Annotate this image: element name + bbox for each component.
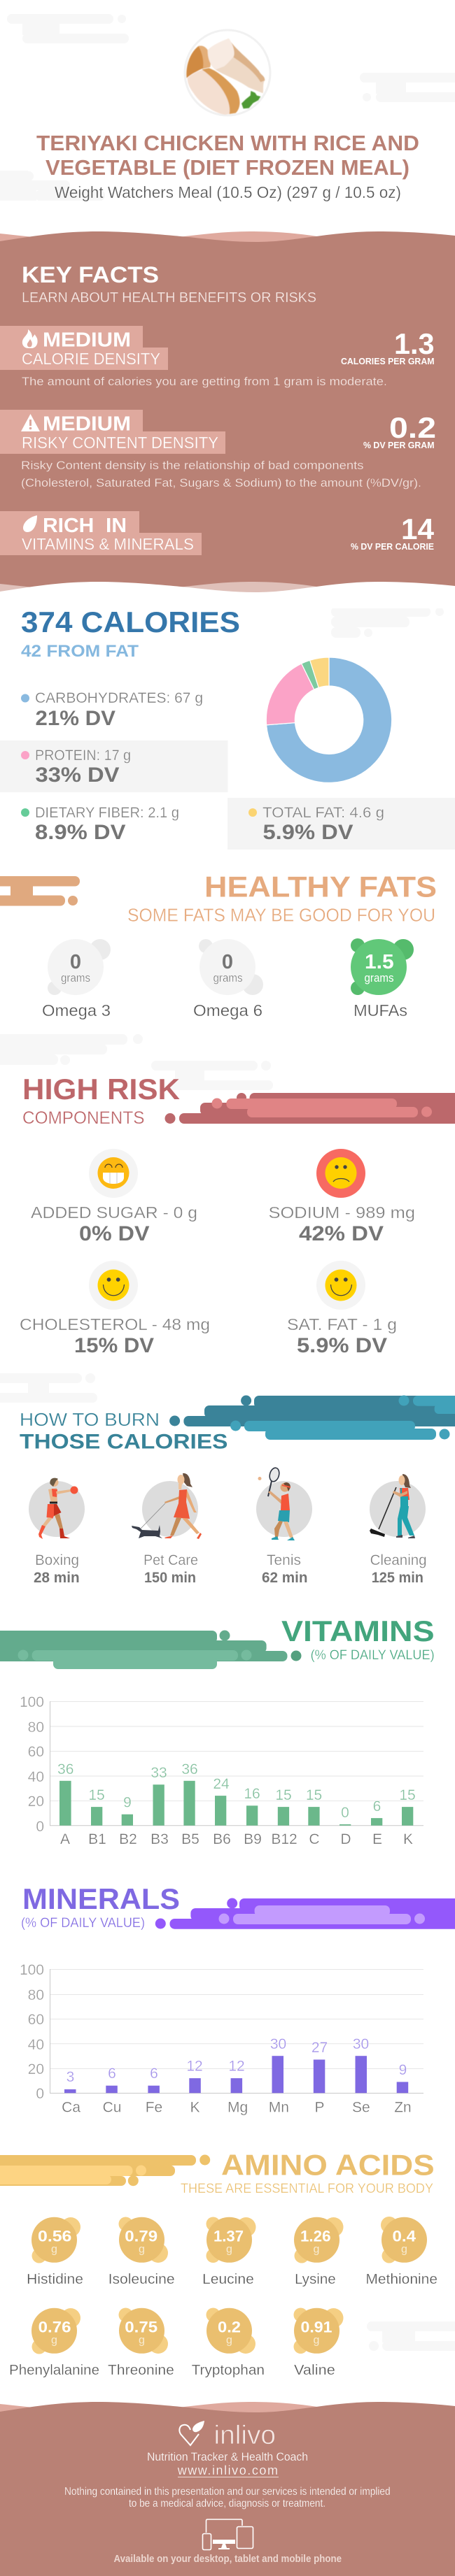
amino acid: lysine: g [314, 2244, 319, 2256]
amino acid: methionine: 0.4 [392, 2228, 416, 2245]
chart: minerals bar chart: Mn [269, 2100, 289, 2116]
subheading: SOME FATS MAY BE GOOD FOR YOU [127, 905, 435, 926]
label: RISKY CONTENT DENSITY [22, 434, 218, 452]
icon: smiling face [98, 1270, 129, 1301]
chart: vitamins bar chart: 6 [373, 1798, 381, 1815]
legend: carbohydrates [21, 690, 203, 730]
chart: vitamins bar chart: 36 [181, 1761, 198, 1777]
amino acid: leucine: 1.37 [214, 2228, 244, 2245]
activity: tennis: Tenis [267, 1552, 301, 1568]
subheading: components: COMPONENTS [22, 1108, 144, 1128]
unit: % DV PER GRAM [363, 441, 434, 450]
heading: high risk: HIGH RISK [22, 1073, 180, 1105]
subheading: (% OF DAILY VALUE) [311, 1648, 435, 1663]
chart: vitamins bar chart: B9 [244, 1831, 262, 1847]
website link: www.inlivo.com [177, 2463, 278, 2477]
amino acid: phenylalanine [9, 2308, 99, 2378]
chart: vitamins bar chart: 36 [57, 1761, 74, 1777]
legend: protein [0, 740, 228, 792]
panel: high risk components [20, 1073, 455, 1357]
amino acid: isoleucine: Isoleucine [108, 2272, 175, 2287]
amino acid: leucine [202, 2217, 256, 2287]
component: sodium [269, 1149, 415, 1245]
rating: medium: MEDIUM [43, 413, 131, 435]
chart: vitamins bar chart: 15 [306, 1787, 322, 1803]
chart: minerals bar chart: Mg [227, 2100, 248, 2116]
chart: vitamins bar chart: B6 [213, 1831, 231, 1847]
chart: minerals bar chart: 9 [399, 2062, 407, 2078]
amino acid: valine: g [314, 2335, 319, 2347]
legend: dietary fiber [21, 805, 179, 844]
amino acid: valine: 0.91 [301, 2319, 332, 2336]
component: cholesterol [20, 1261, 210, 1357]
heading: 374 calories: 374 CALORIES [21, 606, 240, 638]
label: CALORIE DENSITY [22, 350, 160, 368]
chart: minerals bar chart: 0 [36, 2086, 44, 2102]
panel: minerals [20, 1882, 455, 2116]
chart: minerals bar chart: Zn [394, 2100, 412, 2116]
chart: vitamins bar chart: 0 [341, 1805, 349, 1821]
chart: minerals bar chart: 6 [150, 2066, 158, 2082]
activity: boxing: 28 min [34, 1570, 80, 1586]
legend: total fat: 5.9% DV [263, 821, 353, 844]
chart: minerals bar chart: Fe [146, 2100, 162, 2116]
amino acid: threonine [108, 2307, 174, 2378]
title: VEGETABLE (DIET FROZEN MEAL) [46, 155, 410, 180]
amino acid: isoleucine: 0.79 [125, 2228, 158, 2245]
amino acid: histidine [27, 2217, 83, 2287]
chart: vitamins bar chart: C [309, 1831, 320, 1847]
chart: minerals bar chart: P [314, 2100, 325, 2116]
amino acid: threonine: 0.75 [125, 2319, 158, 2336]
chart: vitamins bar chart: 24 [213, 1776, 230, 1792]
chart: vitamins bar chart: B12 [271, 1831, 298, 1847]
amino acid: histidine: 0.56 [38, 2228, 71, 2245]
subheading: LEARN ABOUT HEALTH BENEFITS OR RISKS [22, 290, 316, 306]
heading: amino acids: AMINO ACIDS [221, 2149, 435, 2182]
amino acid: histidine: Histidine [27, 2272, 83, 2287]
banner: red cloud [165, 1093, 455, 1124]
activity: tennis [256, 1467, 312, 1586]
panel: footer [0, 2402, 455, 2576]
value: 14: 14 [401, 513, 435, 545]
icon: sad face [325, 1157, 357, 1189]
legend: protein: 33% DV [35, 764, 119, 787]
subheading: THESE ARE ESSENTIAL FOR YOUR BODY [181, 2182, 433, 2196]
fat: mufas [351, 938, 414, 1019]
activity: pet care [132, 1473, 202, 1586]
amino acid: lysine: 1.26 [300, 2228, 330, 2245]
panel: vitamins [0, 1615, 435, 1847]
legend: dietary fiber: 8.9% DV [35, 821, 126, 844]
component: saturated fat: 5.9% DV [297, 1334, 387, 1357]
label: VITAMINS & MINERALS [22, 535, 194, 553]
legend: dietary fiber: DIETARY FIBER: 2.1 g [35, 805, 179, 821]
panel: calories [0, 606, 455, 850]
amino acid: phenylalanine: g [51, 2335, 57, 2347]
description: Risky Content density is the relationship of bad components [21, 459, 364, 472]
fact: risky content density [0, 410, 436, 489]
fat: omega 6: 0 [222, 951, 233, 973]
icon: desktop, tablet and phone [203, 2519, 253, 2549]
availability note: Available on your desktop, tablet and mobile phone [113, 2553, 342, 2565]
banner: purple cloud [155, 1898, 455, 1929]
chart: minerals bar chart: 80 [28, 1987, 44, 2003]
amino acid: isoleucine: g [139, 2244, 145, 2256]
amino acid: phenylalanine: Phenylalanine [9, 2363, 99, 2378]
amino acid: tryptophan: g [226, 2335, 232, 2347]
amino acid: tryptophan [192, 2307, 265, 2378]
component: sodium: SODIUM - 989 mg [269, 1203, 415, 1222]
disclaimer: to be a medical advice, diagnosis or treatment. [129, 2498, 326, 2510]
amino acid: leucine: g [226, 2244, 232, 2256]
chart: macronutrient donut [266, 657, 392, 782]
amino acid: phenylalanine: 0.76 [38, 2319, 71, 2336]
chart: minerals bar chart: K [190, 2100, 200, 2116]
chart: minerals bar chart: 3 [66, 2069, 74, 2085]
icon: flame [22, 329, 38, 348]
amino acid: threonine: Threonine [108, 2363, 174, 2378]
legend: carbohydrates: CARBOHYDRATES: 67 g [35, 690, 203, 706]
component: saturated fat [287, 1261, 397, 1357]
rating: rich in: RICH IN [43, 515, 127, 537]
chart: vitamins bar chart: B1 [88, 1831, 106, 1847]
heading: those calories: THOSE CALORIES [20, 1431, 227, 1454]
chart: minerals bar chart: Ca [62, 2100, 80, 2116]
activity: cleaning: 125 min [372, 1570, 424, 1586]
chart: vitamins bar chart: 33 [150, 1765, 167, 1781]
tagline: Nutrition Tracker & Health Coach [147, 2450, 308, 2463]
heading: how to burn: HOW TO BURN [20, 1409, 160, 1430]
description: The amount of calories you are getting from 1 gram is moderate. [22, 375, 387, 388]
chart: vitamins bar chart: 60 [28, 1744, 44, 1760]
activity: boxing: Boxing [35, 1552, 79, 1568]
activity: cleaning: Cleaning [370, 1552, 427, 1568]
amino acid: valine [294, 2307, 343, 2378]
icon: warning [21, 414, 40, 431]
chart: minerals bar chart: 30 [270, 2036, 286, 2052]
chart: vitamins bar chart: 15 [88, 1787, 105, 1803]
description: (Cholesterol, Saturated Fat, Sugars & Sodium) to the amount (%DV/gr). [21, 476, 421, 489]
value: 1.3: 1.3 [394, 327, 434, 360]
fat: omega 6 [193, 939, 263, 1019]
heading: vitamins: VITAMINS [281, 1615, 435, 1647]
disclaimer: Nothing contained in this presentation and our services is intended or implied [64, 2486, 391, 2498]
amino acid: valine: Valine [294, 2363, 335, 2378]
chart: minerals bar chart: 40 [28, 2037, 44, 2053]
activity: cleaning [370, 1474, 427, 1586]
component: saturated fat: SAT. FAT - 1 g [287, 1315, 397, 1333]
chart: minerals bar chart: Cu [103, 2100, 121, 2116]
logo: inlivo heart and wordmark: inlivo [214, 2421, 276, 2450]
icon: woman walking dog [132, 1473, 202, 1539]
chart: minerals bar chart: Se [352, 2100, 370, 2116]
panel: amino acids [0, 2149, 438, 2378]
activity: pet care: 150 min [144, 1570, 196, 1586]
logo: inlivo heart and wordmark [179, 2421, 276, 2450]
chart: vitamins bar chart: 40 [28, 1769, 44, 1785]
amino acid: histidine: g [51, 2244, 57, 2256]
component: added sugar: ADDED SUGAR - 0 g [31, 1203, 197, 1222]
header: food image and title [36, 30, 419, 201]
chart: vitamins bar chart: B2 [119, 1831, 137, 1847]
chart: minerals bar chart: 12 [228, 2059, 245, 2074]
icon: grinning face [98, 1157, 129, 1189]
chart: vitamins bar chart: K [403, 1831, 413, 1847]
panel: how to burn those calories [20, 1396, 455, 1586]
amino acid: threonine: g [139, 2335, 145, 2347]
icon: tennis player [258, 1467, 295, 1540]
chart: vitamins bar chart: D [340, 1831, 351, 1847]
disclaimer [64, 2486, 391, 2510]
chart: vitamins bar chart: 100 [20, 1694, 44, 1710]
rating: medium: MEDIUM [43, 329, 131, 351]
component: cholesterol: 15% DV [74, 1334, 154, 1357]
amino acid: methionine: Methionine [365, 2272, 438, 2287]
chart: minerals bar chart [20, 1962, 424, 2116]
chart: vitamins bar chart: A [60, 1831, 70, 1847]
chart: vitamins bar chart: 16 [244, 1786, 260, 1802]
chart: vitamins bar chart: 20 [28, 1794, 44, 1810]
activity: boxing [29, 1478, 85, 1586]
chart: vitamins bar chart [20, 1694, 424, 1847]
icon: boxer [38, 1478, 78, 1539]
heading: key facts: KEY FACTS [22, 262, 159, 287]
amino acid: isoleucine [108, 2217, 175, 2287]
amino acid: tryptophan: 0.2 [218, 2319, 241, 2336]
image: sliced chicken breast in circle [185, 30, 270, 115]
subtitle: Weight Watchers Meal (10.5 Oz) (297 g / 10.5 oz) [55, 183, 401, 201]
subheading: 42 from fat: 42 FROM FAT [21, 642, 139, 661]
fat: mufas: 1.5 [365, 951, 394, 973]
amino acid: methionine [365, 2217, 438, 2287]
chart: minerals bar chart: 6 [108, 2066, 116, 2082]
fat: omega 3: 0 [70, 951, 81, 973]
fat: mufas: grams [364, 971, 393, 985]
amino acid: leucine: Leucine [202, 2272, 254, 2287]
activity: pet care: Pet Care [144, 1552, 198, 1568]
chart: minerals bar chart: 12 [186, 2059, 203, 2074]
subheading: (% OF DAILY VALUE) [21, 1916, 145, 1931]
chart: minerals bar chart: 100 [20, 1962, 44, 1978]
icon: leaf [23, 515, 37, 532]
chart: minerals bar chart: 27 [312, 2040, 328, 2056]
legend: total fat [227, 798, 455, 850]
chart: minerals bar chart: 30 [353, 2036, 369, 2052]
fat: omega 3: Omega 3 [42, 1001, 111, 1019]
amino acid: lysine [294, 2217, 343, 2287]
component: added sugar: 0% DV [79, 1222, 150, 1245]
amino acid: tryptophan: Tryptophan [192, 2363, 265, 2378]
activity: tennis: 62 min [262, 1570, 308, 1586]
panel: healthy fats [0, 871, 437, 1019]
component: cholesterol: CHOLESTEROL - 48 mg [20, 1315, 210, 1333]
chart: vitamins bar chart: B5 [181, 1831, 200, 1847]
fact: calorie density [0, 326, 434, 388]
chart: vitamins bar chart: 0 [36, 1819, 44, 1835]
fat: omega 6: grams [213, 971, 242, 985]
unit: % DV PER CALORIE [351, 542, 434, 552]
banner: green cloud [0, 1631, 301, 1669]
banner: yellow cloud [0, 2155, 210, 2186]
component: added sugar [31, 1149, 197, 1245]
banner: teal cloud [169, 1396, 455, 1440]
value: 0.2: 0.2 [389, 411, 436, 444]
chart: vitamins bar chart: 15 [399, 1787, 416, 1803]
fat: omega 3 [42, 939, 111, 1019]
fact: rich in vitamins and minerals [0, 511, 435, 555]
chart: vitamins bar chart: 15 [275, 1787, 292, 1803]
heading: healthy fats: HEALTHY FATS [204, 871, 437, 903]
fat: omega 3: grams [61, 971, 90, 985]
chart: vitamins bar chart: B3 [150, 1831, 169, 1847]
chart: vitamins bar chart: 80 [28, 1719, 44, 1736]
panel: key facts [0, 231, 455, 608]
banner: orange cloud [0, 876, 80, 906]
legend: carbohydrates: 21% DV [35, 707, 115, 730]
legend: protein: PROTEIN: 17 g [35, 747, 131, 764]
heading: minerals: MINERALS [22, 1882, 180, 1915]
fat: omega 6: Omega 6 [193, 1001, 262, 1019]
chart: vitamins bar chart: 9 [123, 1795, 132, 1811]
chart: vitamins bar chart: E [372, 1831, 382, 1847]
legend: total fat: TOTAL FAT: 4.6 g [262, 805, 384, 821]
amino acid: lysine: Lysine [295, 2272, 336, 2287]
unit: CALORIES PER GRAM [341, 357, 434, 366]
component: sodium: 42% DV [299, 1222, 384, 1245]
icon: smiling face [325, 1270, 357, 1301]
title [36, 131, 419, 180]
fat: mufas: MUFAs [354, 1001, 407, 1019]
icon: person with broom [370, 1474, 415, 1538]
title: TERIYAKI CHICKEN WITH RICE AND [36, 131, 419, 155]
description [21, 459, 421, 489]
chart: minerals bar chart: 20 [28, 2061, 44, 2077]
chart: minerals bar chart: 60 [28, 2012, 44, 2028]
amino acid: methionine: g [401, 2244, 407, 2256]
